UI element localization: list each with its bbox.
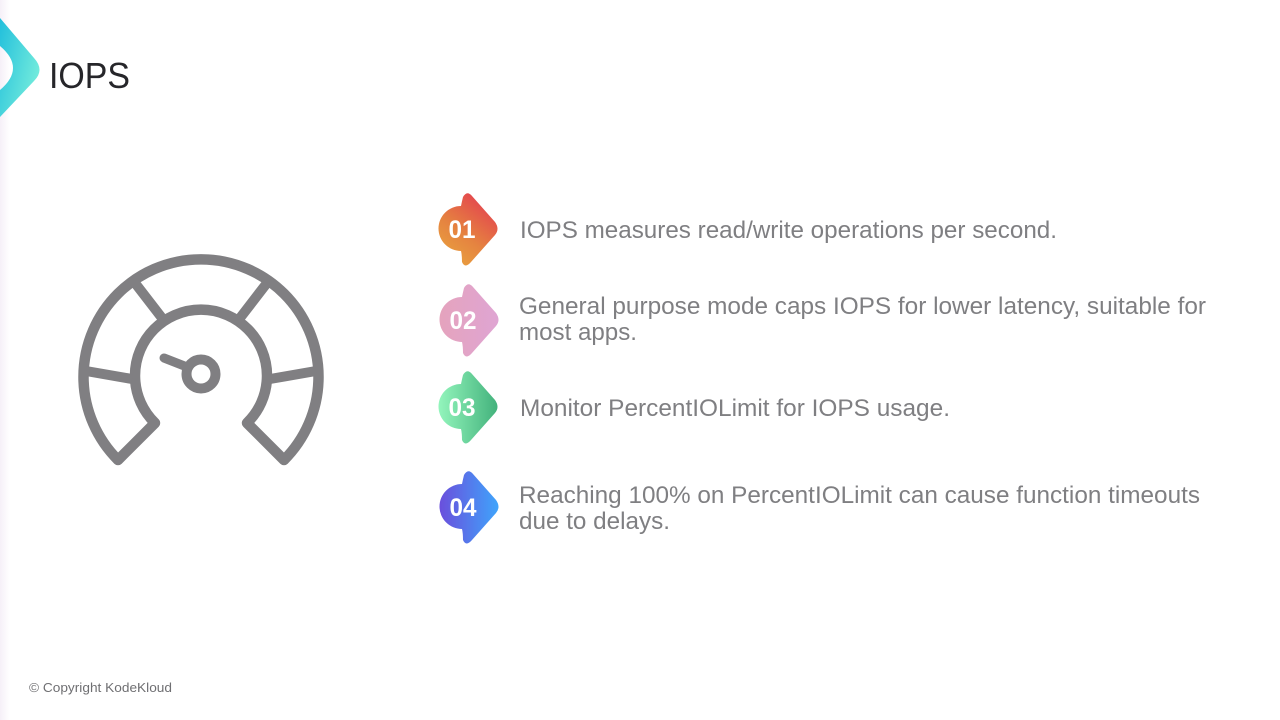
gauge hub (186, 360, 216, 388)
text 04: due to delays. (519, 508, 670, 535)
icon: logo chevron (0, 18, 40, 117)
item 04 (440, 471, 1200, 544)
badge 02 (440, 284, 498, 356)
text 01: IOPS measures read/write operations per second. (520, 217, 1057, 244)
badge 04: 04 (450, 494, 477, 522)
badge 01 (439, 193, 498, 266)
text 02: most apps. (519, 319, 637, 346)
title: IOPS (49, 55, 130, 96)
text 03: Monitor PercentIOLimit for IOPS usage. (520, 395, 950, 422)
gauge spokes (86, 283, 316, 379)
badge 03 (439, 371, 498, 444)
text 02: General purpose mode caps IOPS for lower latency, suitable for (519, 293, 1206, 320)
icon: speedometer gauge (84, 259, 319, 460)
badge 03: 03 (448, 394, 476, 422)
gauge outer and inner arcs (84, 259, 319, 460)
badge 02: 02 (450, 307, 476, 335)
gauge needle (164, 358, 187, 367)
badge 01: 01 (448, 216, 476, 244)
item 02 (440, 284, 1206, 356)
item 03 (439, 371, 950, 444)
text 04: Reaching 100% on PercentIOLimit can cause function timeouts (519, 482, 1200, 509)
item 01 (439, 193, 1057, 266)
copyright footer: © Copyright KodeKloud (29, 680, 172, 695)
badge 04 (440, 471, 498, 544)
